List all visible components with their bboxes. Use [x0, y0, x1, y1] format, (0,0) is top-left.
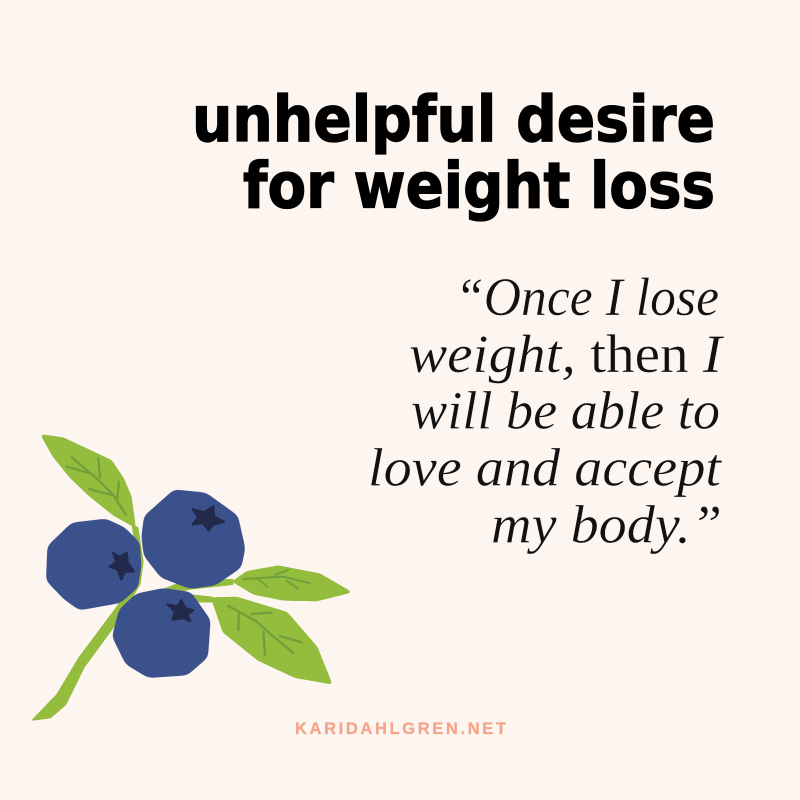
title	[192, 83, 715, 222]
quote text: weight, then I	[409, 324, 725, 384]
title: unhelpful desire	[192, 83, 715, 156]
berry: top right	[141, 489, 245, 589]
quote text	[368, 267, 725, 554]
leaf: right upper	[232, 565, 353, 601]
quote text: my body.”	[491, 494, 722, 554]
leaf: top left	[40, 434, 136, 528]
stem	[31, 524, 233, 721]
title: for weight loss	[243, 150, 715, 222]
quote text: love and accept	[368, 438, 723, 498]
quote text: “Once I lose	[455, 267, 719, 327]
icon: blueberry branch	[31, 434, 353, 721]
quote text: will be able to	[411, 380, 720, 440]
leaf: right lower	[211, 597, 333, 685]
berry: left	[46, 519, 141, 610]
website footer: KARIDAHLGREN.NET	[295, 720, 506, 738]
berry: bottom	[112, 588, 211, 678]
